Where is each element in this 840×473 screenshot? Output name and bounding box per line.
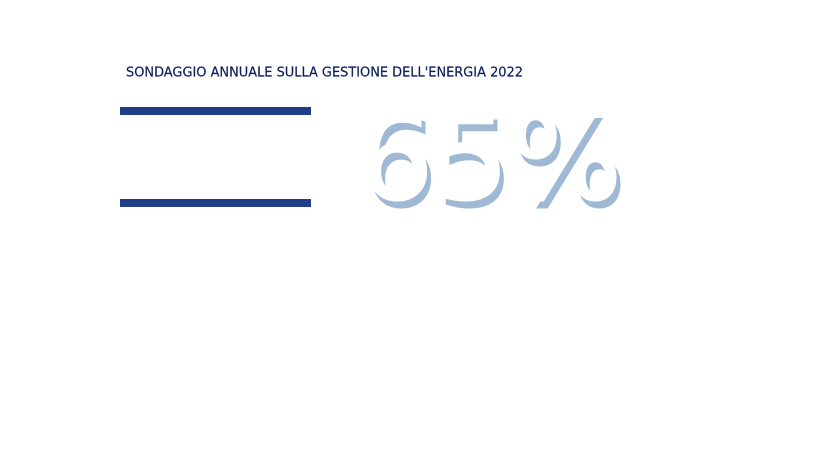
big statistic: 65% [358, 90, 626, 234]
top rule [120, 107, 311, 115]
title: SONDAGGIO ANNUALE SULLA GESTIONE DELL'ENERGIA 2022 [126, 66, 523, 80]
bottom rule [120, 199, 311, 207]
statistic shadow: 65% [362, 97, 626, 234]
statistic value: 65% [358, 90, 622, 227]
